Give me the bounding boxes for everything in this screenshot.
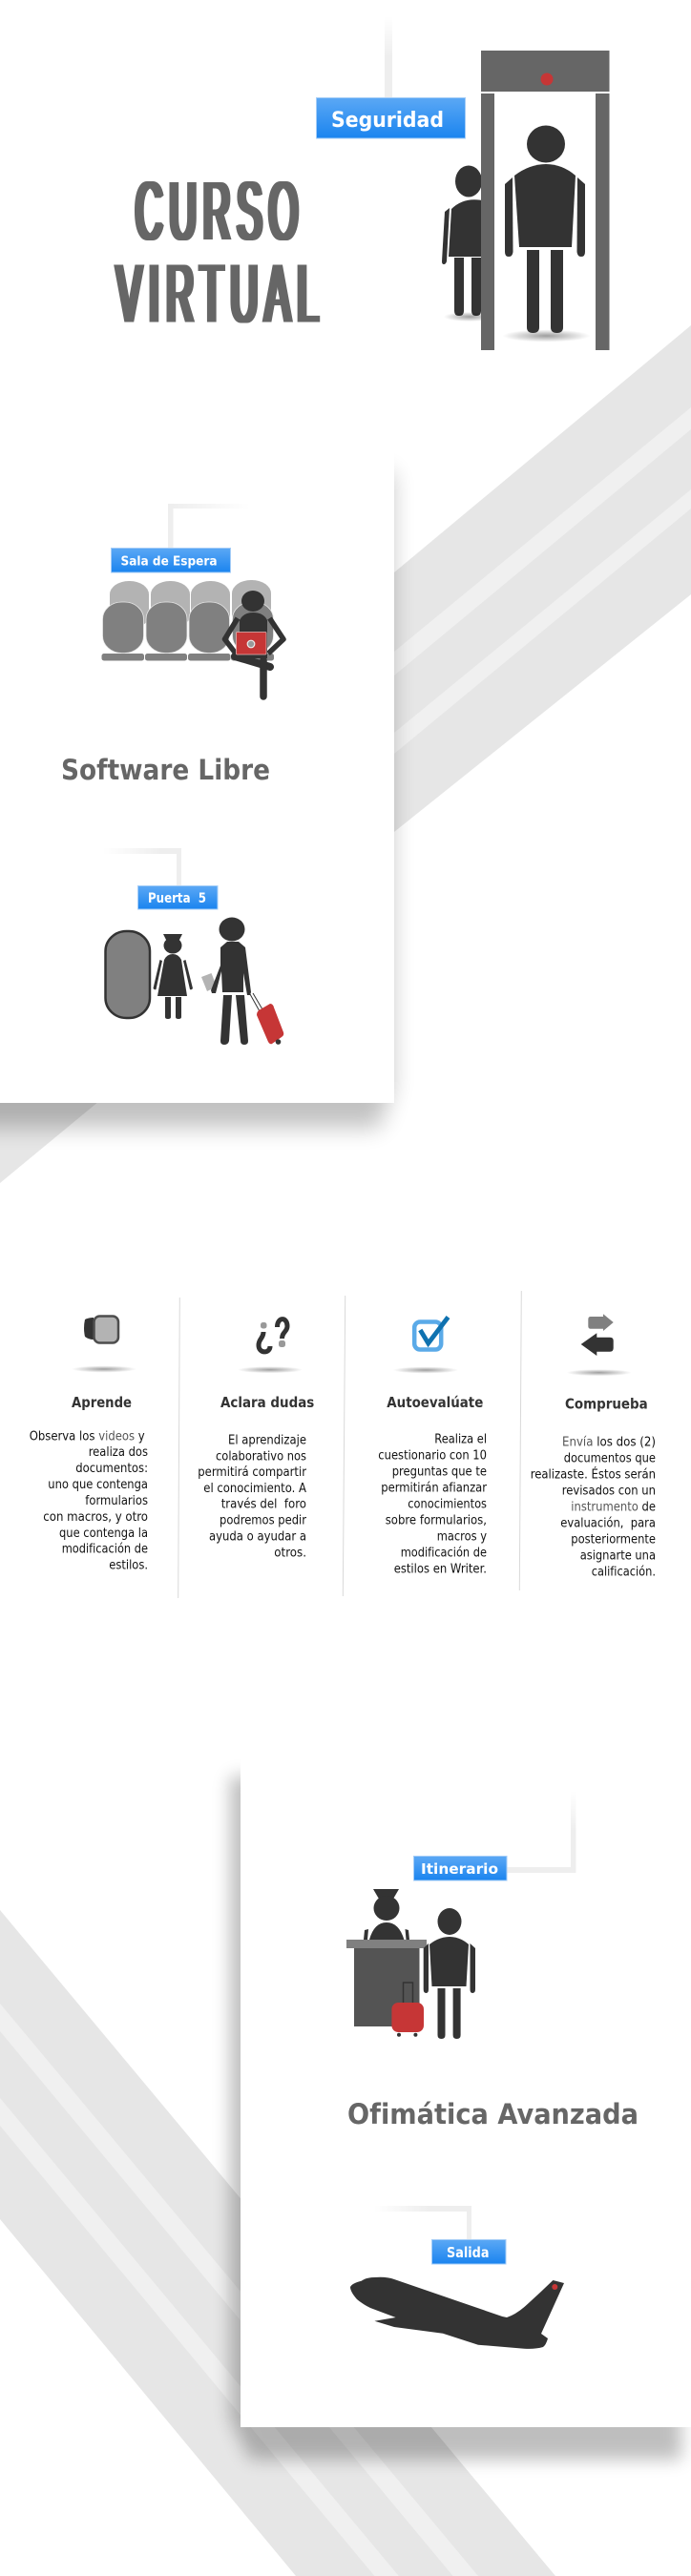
text: aclara dudas: colaborativo nos bbox=[216, 1449, 306, 1464]
label: sala de espera bbox=[111, 548, 231, 572]
text: autoevaluate bbox=[378, 1433, 488, 1577]
icon: check-in desk with agent and passenger bbox=[346, 1889, 475, 2039]
text: aprende: formularios bbox=[85, 1494, 148, 1508]
connector: sala de espera bbox=[168, 504, 250, 548]
label: salida bbox=[431, 2240, 506, 2264]
text: aprende: modificación de bbox=[62, 1543, 148, 1557]
text: autoevaluate: sobre formularios, bbox=[386, 1514, 487, 1528]
heading: autoevaluate: Autoevalúate bbox=[387, 1394, 483, 1411]
floor shadow bbox=[502, 330, 590, 342]
label: seguridad bbox=[317, 97, 466, 138]
label: itinerario: Itinerario bbox=[421, 1860, 498, 1878]
label: puerta 5: Puerta 5 bbox=[148, 891, 206, 906]
text: aprende: realiza dos bbox=[89, 1445, 148, 1460]
desk bbox=[354, 1948, 420, 2026]
panel shadow: software libre bbox=[0, 472, 392, 1128]
gate alarm light bbox=[540, 73, 554, 86]
text: aclara dudas: El aprendizaje bbox=[228, 1433, 306, 1447]
passenger bbox=[211, 918, 251, 1045]
text: comprueba: asignarte una bbox=[580, 1549, 656, 1564]
icon: airplane bbox=[350, 2277, 564, 2349]
text: autoevaluate: estilos en Writer. bbox=[394, 1563, 487, 1577]
panel: ofimatica avanzada bbox=[241, 1751, 691, 2427]
icon: question marks bbox=[259, 1319, 287, 1352]
title: curso virtual: CURSO bbox=[136, 166, 304, 258]
label: seguridad: Seguridad bbox=[331, 108, 444, 133]
text: aprende: que contenga la bbox=[59, 1527, 148, 1541]
text: aprende: uno que contenga bbox=[48, 1478, 148, 1492]
text: comprueba: realizaste. Éstos serán bbox=[531, 1467, 656, 1483]
text: autoevaluate: permitirán afianzar bbox=[381, 1482, 488, 1496]
boarding pass bbox=[201, 973, 217, 991]
text: autoevaluate: conocimientos bbox=[408, 1498, 487, 1512]
heading: comprueba: Comprueba bbox=[565, 1396, 648, 1413]
text: aprende: estilos. bbox=[109, 1559, 148, 1573]
text: comprueba: revisados con un bbox=[562, 1485, 656, 1499]
text: aprende: con macros, y otro bbox=[43, 1510, 148, 1525]
icon: exchange arrows bbox=[581, 1314, 614, 1356]
red suitcase bbox=[250, 993, 283, 1045]
text: aclara dudas: otros. bbox=[274, 1547, 306, 1561]
text: aclara dudas: permitirá compartir bbox=[198, 1465, 307, 1480]
panel shadow: ofimatica avanzada bbox=[230, 1776, 681, 2460]
icon shadow bbox=[238, 1366, 303, 1373]
agent bbox=[364, 1889, 409, 1940]
text: autoevaluate: macros y bbox=[437, 1530, 487, 1545]
large passenger bbox=[505, 126, 585, 333]
label: salida: Salida bbox=[447, 2244, 489, 2261]
column: comprueba bbox=[531, 1314, 656, 1579]
panel: software libre bbox=[0, 448, 394, 1103]
text: aclara dudas: ayuda o ayudar a bbox=[209, 1530, 306, 1545]
connector: puerta 5 bbox=[103, 848, 181, 885]
background band: upper diagonal bbox=[0, 325, 691, 1183]
text: aclara dudas: el conocimiento. A bbox=[203, 1482, 306, 1496]
icon shadow bbox=[567, 1369, 632, 1376]
text: comprueba: instrumento de bbox=[571, 1501, 656, 1515]
heading: ofimatica avanzada: Ofimática Avanzada bbox=[347, 2098, 639, 2130]
icon: checkbox bbox=[414, 1317, 449, 1349]
text: comprueba: posteriormente bbox=[571, 1533, 656, 1548]
heading: software libre: Software Libre bbox=[61, 754, 270, 786]
text: aclara dudas: través del foro bbox=[221, 1498, 306, 1512]
gate bbox=[481, 51, 609, 350]
connector: itinerario bbox=[507, 1791, 576, 1873]
text: aprende: Observa los videos y bbox=[30, 1429, 145, 1444]
aircraft door bbox=[105, 931, 150, 1018]
text: comprueba: documentos que bbox=[564, 1452, 656, 1466]
text: autoevaluate: modificación de bbox=[401, 1547, 487, 1561]
title: curso virtual bbox=[116, 166, 325, 341]
icon shadow bbox=[393, 1366, 458, 1374]
label: itinerario bbox=[414, 1857, 507, 1880]
icon: waiting room seats with passenger bbox=[101, 580, 283, 696]
column: aprende bbox=[30, 1317, 148, 1573]
text: aprende bbox=[30, 1429, 148, 1573]
icon shadow bbox=[72, 1366, 136, 1372]
passenger bbox=[424, 1908, 475, 2039]
text: aprende: documentos: bbox=[75, 1462, 148, 1476]
red suitcase bbox=[391, 1983, 424, 2037]
label: puerta 5 bbox=[137, 885, 218, 909]
text: aclara dudas bbox=[198, 1433, 307, 1561]
text: comprueba: evaluación, para bbox=[560, 1517, 656, 1531]
text: aclara dudas: podremos pedir bbox=[220, 1514, 307, 1528]
attendant bbox=[153, 934, 193, 1019]
icon: security gate with passengers bbox=[442, 51, 609, 350]
connector: salida bbox=[374, 2206, 471, 2239]
text: autoevaluate: Realiza el bbox=[434, 1433, 487, 1447]
text: autoevaluate: preguntas que te bbox=[392, 1465, 487, 1480]
text: comprueba bbox=[531, 1436, 656, 1579]
heading: aprende: Aprende bbox=[72, 1394, 132, 1411]
column: aclara dudas bbox=[198, 1319, 314, 1561]
background band: lower diagonal bbox=[0, 1910, 555, 2576]
text: autoevaluate: cuestionario con 10 bbox=[378, 1449, 487, 1464]
connector: seguridad bbox=[385, 16, 392, 97]
heading: aclara dudas: Aclara dudas bbox=[220, 1394, 314, 1411]
column: autoevaluate bbox=[378, 1317, 488, 1577]
title: curso virtual: VIRTUAL bbox=[116, 248, 325, 341]
text: comprueba: calificación. bbox=[592, 1565, 656, 1579]
label: sala de espera: Sala de Espera bbox=[120, 553, 218, 569]
text: comprueba: Envía los dos (2) bbox=[562, 1436, 656, 1450]
seated passenger bbox=[225, 591, 283, 696]
small passenger bbox=[442, 166, 495, 322]
icon: boarding gate with attendant and passenger bbox=[105, 918, 283, 1045]
icon: video camera bbox=[84, 1317, 118, 1343]
